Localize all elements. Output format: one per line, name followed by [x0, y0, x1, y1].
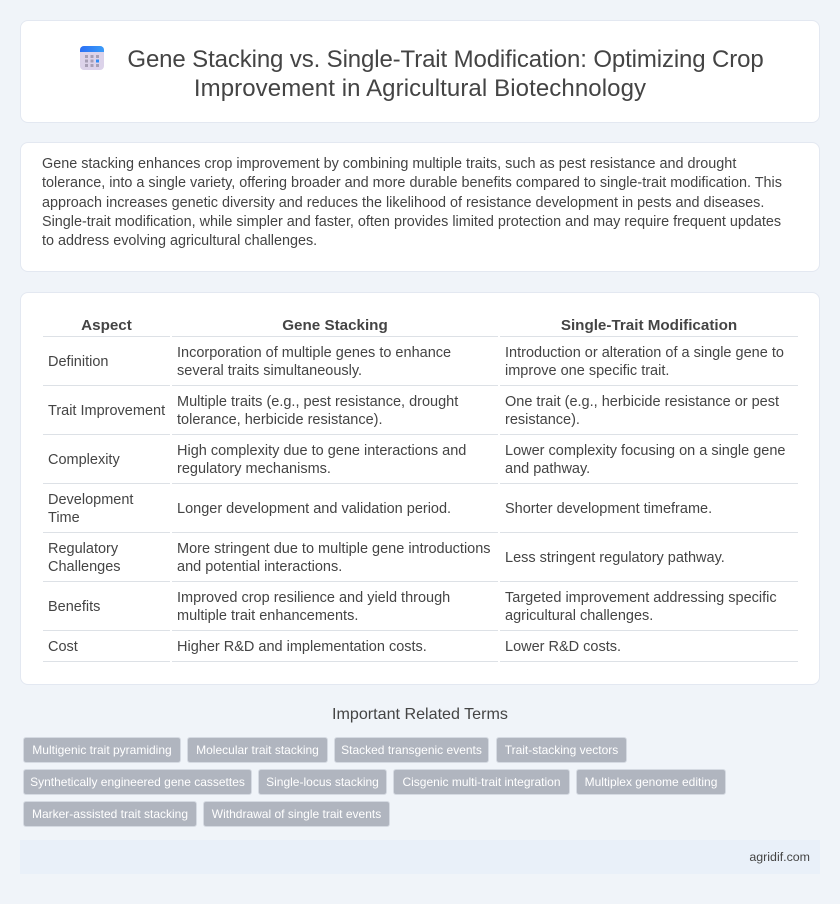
tag	[23, 737, 181, 763]
text: Higher R&D and implementation costs.	[177, 639, 427, 655]
row: development time	[48, 492, 134, 526]
text: Incorporation of multiple genes to enhance	[177, 345, 451, 361]
text: Less stringent regulatory pathway.	[505, 550, 725, 566]
footer text: agridif.com	[749, 850, 810, 864]
text: improve one specific trait.	[505, 363, 669, 379]
tag: Multigenic trait pyramiding	[32, 743, 172, 757]
summary text: approach increases genetic diversity and reduces the likelihood of resistance development in pests and diseases.	[42, 194, 764, 210]
text: Multiple traits (e.g., pest resistance, drought	[177, 394, 458, 410]
text: Targeted improvement addressing specific	[505, 590, 777, 606]
tag: Withdrawal of single trait events	[212, 807, 381, 821]
tag	[393, 769, 570, 795]
row: regulatory challenges: Challenges	[48, 559, 121, 575]
tag	[187, 737, 328, 763]
row: cost: Cost	[48, 639, 78, 655]
title	[127, 46, 764, 102]
comparison table card	[20, 292, 820, 685]
tag	[496, 737, 627, 763]
summary text: tolerance, into a single variety, offering broader and more durable benefits compared to single-trait modification. This	[42, 175, 782, 191]
text: agricultural challenges.	[505, 608, 653, 624]
text: Improved crop resilience and yield through	[177, 590, 450, 606]
row: trait improvement: Trait Improvement	[48, 403, 165, 419]
title: Improvement in Agricultural Biotechnology	[194, 75, 646, 102]
footer bar	[20, 840, 820, 874]
tag: Cisgenic multi-trait integration	[402, 775, 561, 789]
row: development time: Development	[48, 492, 133, 508]
tag: Stacked transgenic events	[341, 743, 482, 757]
summary text: Single-trait modification, while simpler and faster, often provides limited protection and may require frequent updates	[42, 214, 781, 230]
tag: Marker-assisted trait stacking	[32, 807, 188, 821]
text: tolerance, herbicide resistance).	[177, 412, 383, 428]
text: regulatory mechanisms.	[177, 461, 331, 477]
row: complexity: Complexity	[48, 452, 120, 468]
tag: Molecular trait stacking	[196, 743, 319, 757]
row: development time: Time	[48, 510, 80, 526]
tag: Synthetically engineered gene cassettes	[30, 775, 245, 789]
text: several traits simultaneously.	[177, 363, 362, 379]
text: Introduction or alteration of a single gene to	[505, 345, 784, 361]
row: regulatory challenges: Regulatory	[48, 541, 118, 557]
text: Lower complexity focusing on a single gene	[505, 443, 786, 459]
text: multiple trait enhancements.	[177, 608, 358, 624]
title: Gene Stacking vs. Single-Trait Modification: Optimizing Crop	[127, 46, 764, 73]
row: benefits: Benefits	[48, 599, 100, 615]
text: High complexity due to gene interactions and	[177, 443, 466, 459]
row: definition: Definition	[48, 354, 108, 370]
icon: calendar	[80, 46, 104, 70]
text: and potential interactions.	[177, 559, 342, 575]
summary text: to address evolving agricultural challenges.	[42, 233, 317, 249]
tag	[23, 769, 252, 795]
text: Lower R&D costs.	[505, 639, 621, 655]
table header: aspect: Aspect	[81, 317, 132, 334]
summary text	[42, 156, 782, 249]
summary text: Gene stacking enhances crop improvement by combining multiple traits, such as pest resistance and drought	[42, 156, 736, 172]
tag: Single-locus stacking	[266, 775, 379, 789]
table header: gene stacking: Gene Stacking	[282, 317, 388, 334]
text: One trait (e.g., herbicide resistance or pest	[505, 394, 779, 410]
text: resistance).	[505, 412, 580, 428]
text: and pathway.	[505, 461, 590, 477]
header card	[20, 20, 820, 123]
tag	[258, 769, 387, 795]
row: regulatory challenges	[48, 541, 121, 575]
tag: Trait-stacking vectors	[505, 743, 618, 757]
table header: single-trait modification: Single-Trait Modification	[561, 317, 737, 334]
tag	[576, 769, 726, 795]
text: More stringent due to multiple gene introductions	[177, 541, 491, 557]
text: Shorter development timeframe.	[505, 501, 712, 517]
tag: Multiplex genome editing	[585, 775, 717, 789]
text: Longer development and validation period.	[177, 501, 451, 517]
summary card	[20, 142, 820, 272]
related terms heading: Important Related Terms	[332, 705, 508, 723]
tag	[334, 737, 489, 763]
tag	[203, 801, 390, 827]
tag	[23, 801, 197, 827]
